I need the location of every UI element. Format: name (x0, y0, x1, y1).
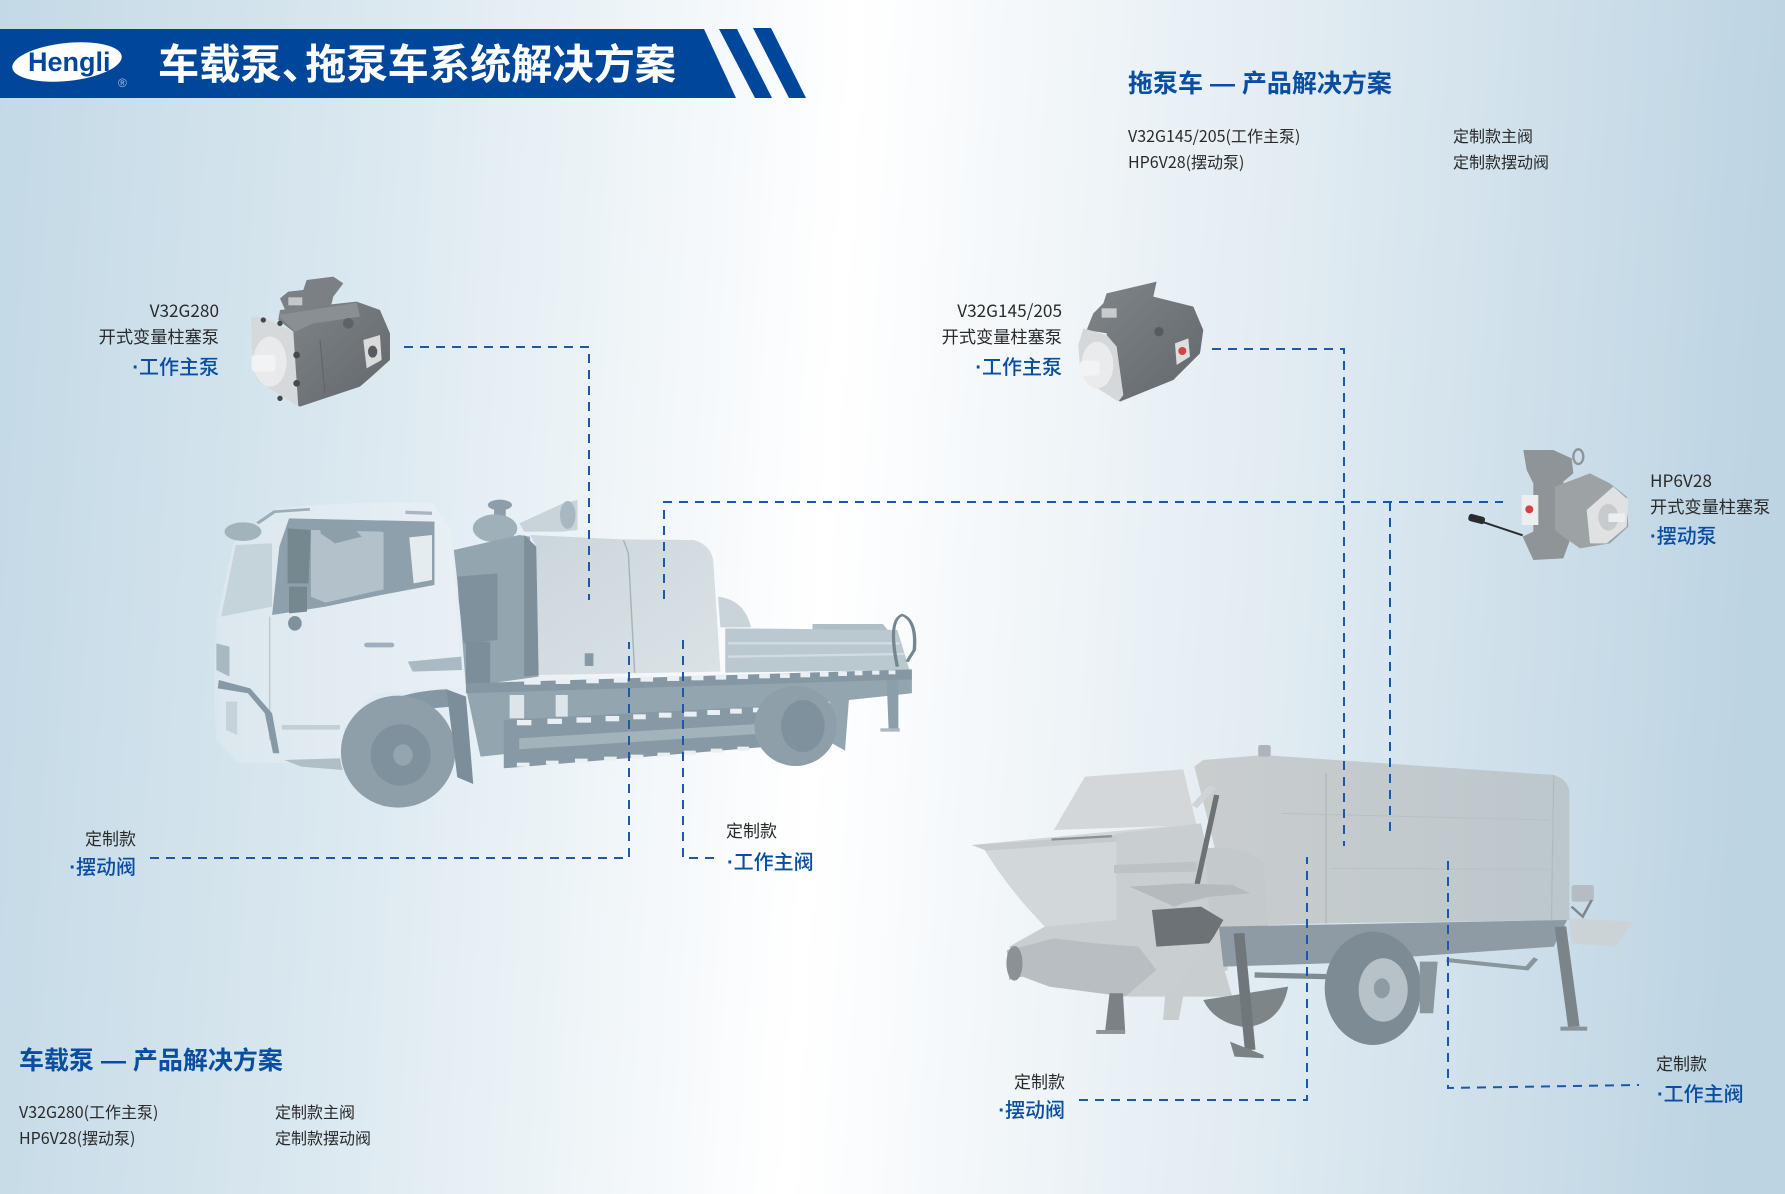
trailer label: main valve (1656, 1050, 1744, 1107)
engine box (454, 535, 539, 687)
pump label: V32G280 (99, 297, 219, 380)
pump label: V32G145/205 (942, 297, 1062, 380)
trailer label: swing valve: ·摆动阀 (998, 1094, 1065, 1123)
logo: Hengli: Hengli (28, 47, 111, 77)
intake pipe (488, 500, 512, 510)
pump label: HP6V28 (1650, 467, 1770, 549)
rear wheel (754, 686, 837, 766)
truck solution list: 定制款主阀 (275, 1099, 355, 1123)
truck solution list (19, 1041, 371, 1149)
title: 车载泵、拖泵车系统解决方案 (158, 31, 676, 91)
trailer label: swing valve (998, 1068, 1065, 1123)
truck label: swing valve: 定制款 (85, 825, 136, 850)
truck solution list: V32G280(工作主泵) (19, 1099, 158, 1123)
truck label: swing valve (69, 825, 136, 880)
trailer solution list: 定制款主阀 (1453, 123, 1533, 147)
truck illustration: 车载泵 (214, 500, 915, 808)
trailer pump illustration: 拖泵车 (971, 745, 1634, 1058)
trailer solution list: 拖泵车 — 产品解决方案 (1128, 64, 1392, 100)
pump label: HP6V28: 开式变量柱塞泵 (1650, 493, 1770, 518)
truck label: swing valve: ·摆动阀 (69, 851, 136, 880)
chassis (466, 677, 912, 757)
pumping assembly (1130, 883, 1250, 907)
trailer solution list: 定制款摆动阀 (1453, 149, 1549, 173)
pump label: HP6V28: HP6V28 (1650, 467, 1712, 492)
pump label: V32G145/205: V32G145/205 (957, 297, 1062, 322)
truck solution list: HP6V28(摆动泵) (19, 1125, 135, 1149)
right tray (1569, 918, 1634, 947)
truck label: main valve: ·工作主阀 (727, 846, 814, 875)
logo: Hengli (10, 37, 127, 90)
trailer solution list (1128, 64, 1549, 173)
connector lines (150, 347, 1639, 1100)
truck solution list: 车载泵 — 产品解决方案 (19, 1041, 283, 1077)
pump: V32G145/205 (1078, 282, 1203, 402)
pump label: V32G280: 开式变量柱塞泵 (99, 323, 219, 348)
header banner (0, 28, 806, 98)
hopper (1054, 769, 1197, 830)
cab (214, 503, 466, 763)
pump label: V32G145/205: ·工作主泵 (975, 351, 1062, 380)
engine housing (1194, 755, 1569, 927)
front wheel (347, 689, 466, 743)
truck label: main valve (726, 817, 814, 875)
lower side rail (504, 706, 769, 768)
pump label: V32G280: ·工作主泵 (132, 351, 219, 380)
trailer label: main valve: ·工作主阀 (1657, 1078, 1744, 1107)
trailer solution list: HP6V28(摆动泵) (1128, 149, 1244, 173)
pump label: V32G145/205: 开式变量柱塞泵 (942, 323, 1062, 348)
pump: HP6V28 (1468, 449, 1628, 560)
pump label: HP6V28: ·摆动泵 (1650, 520, 1717, 549)
truck solution list: 定制款摆动阀 (275, 1125, 371, 1149)
pump: V32G280 (251, 277, 390, 407)
wheels (1203, 987, 1288, 1027)
trailer solution list: V32G145/205(工作主泵) (1128, 123, 1300, 147)
trailer label: main valve: 定制款 (1656, 1050, 1707, 1075)
pump label: V32G280: V32G280 (150, 297, 219, 322)
truck label: main valve: 定制款 (726, 817, 777, 842)
delivery tubes (725, 628, 909, 673)
frame band (1219, 920, 1567, 967)
trailer label: swing valve: 定制款 (1014, 1068, 1065, 1093)
legs and axle (1239, 933, 1250, 1050)
logo: Hengli: ® (118, 76, 127, 90)
